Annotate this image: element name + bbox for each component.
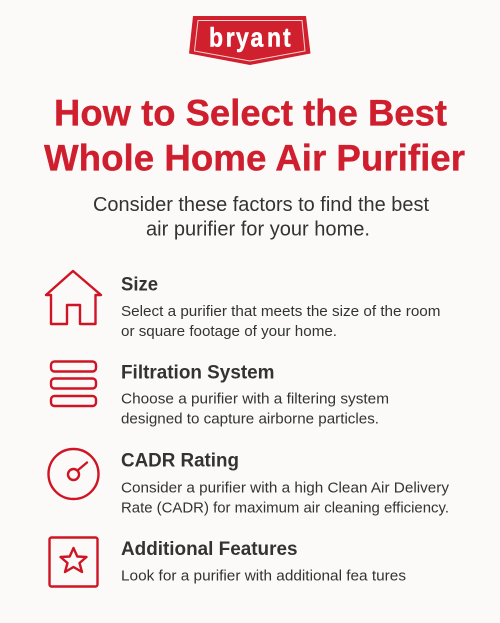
text: size description [121, 303, 440, 340]
text: filtration description [121, 390, 389, 428]
title: Whole Home Air Purifier [44, 138, 465, 178]
text: filtration description: designed to capture airborne particles. [121, 411, 379, 428]
icon: gauge [48, 449, 98, 499]
subtitle [93, 194, 429, 240]
icon: house [46, 271, 101, 324]
text: CADR description [121, 479, 450, 516]
heading: additional features: Additional Features [121, 538, 298, 560]
text: CADR description: Rate (CADR) for maximum air cleaning efficiency. [121, 499, 449, 516]
icon: filter layers [51, 362, 96, 406]
text: size description: or square footage of your home. [121, 323, 337, 340]
text: size description: Select a purifier that meets the size of the room [121, 303, 440, 320]
text: CADR description: Consider a purifier with a high Clean Air Delivery [121, 479, 450, 496]
heading: filtration system: Filtration System [121, 361, 274, 383]
title [44, 92, 465, 178]
heading: size: Size [121, 273, 158, 295]
heading: CADR rating: CADR Rating [121, 450, 239, 472]
subtitle: Consider these factors to find the best [93, 194, 429, 216]
icon: star in square [50, 538, 98, 586]
subtitle: air purifier for your home. [146, 218, 370, 240]
logo: bryant: bryant [209, 23, 291, 53]
title: How to Select the Best [54, 92, 447, 134]
text: filtration description: Choose a purifier with a filtering system [121, 390, 389, 407]
logo: bryant [189, 16, 310, 65]
text: additional features description: Look for a purifier with additional fea tures [121, 568, 406, 585]
